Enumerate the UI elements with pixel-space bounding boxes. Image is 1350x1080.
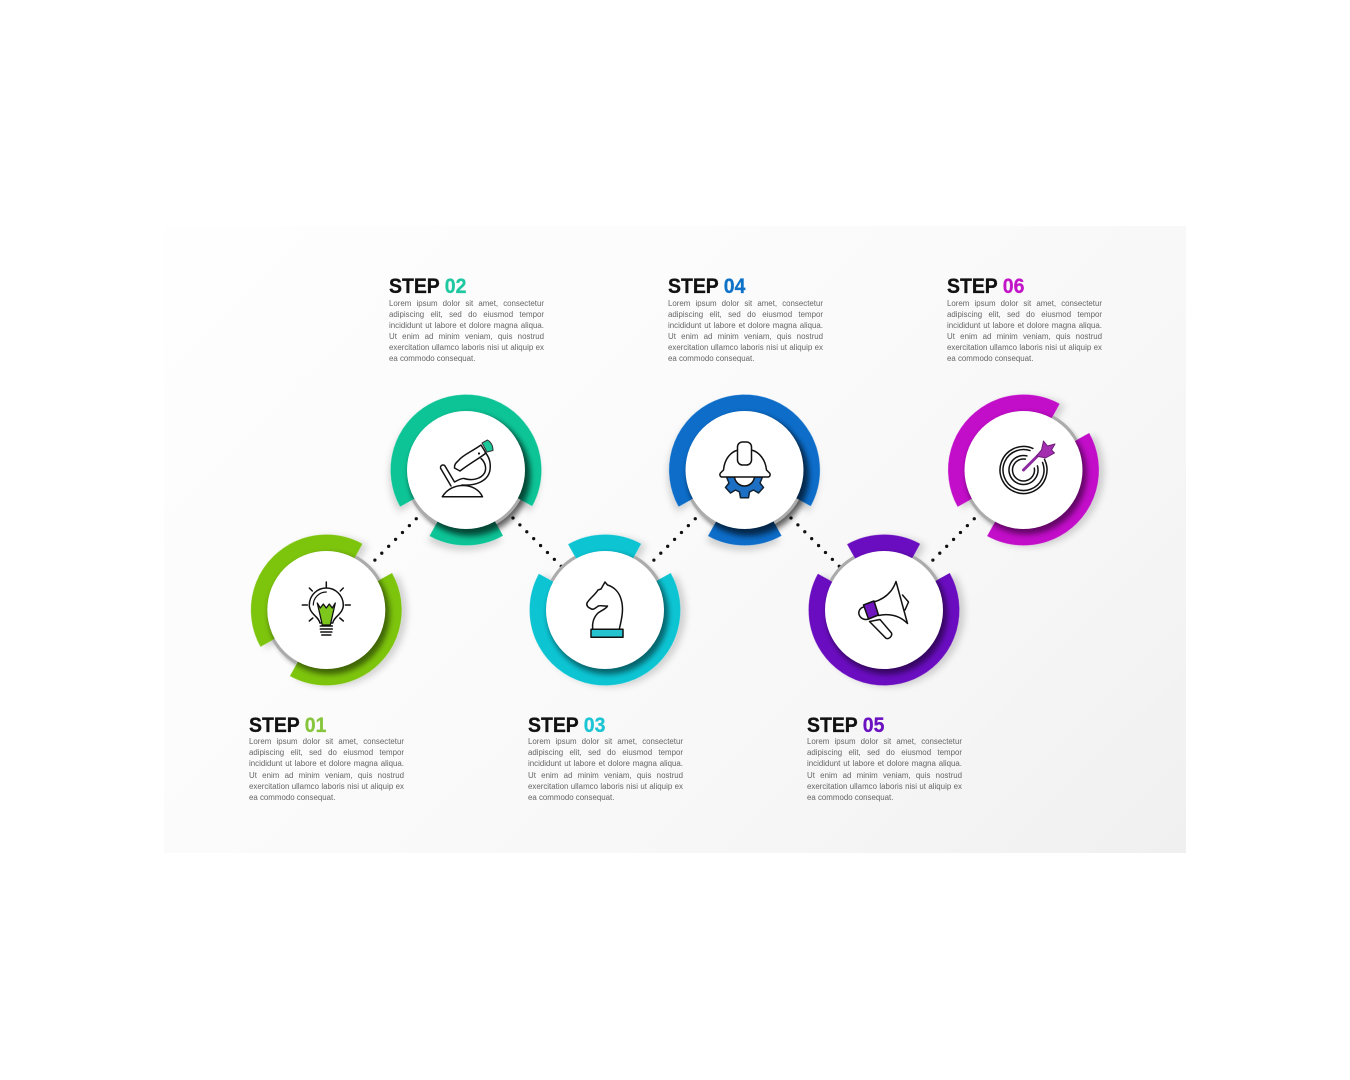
body text: step 05: adipiscing elit, sed do eiusmod tempor xyxy=(807,748,962,757)
icon: light bulb xyxy=(302,582,350,635)
body text: step 01 xyxy=(249,737,404,802)
body text: step 04: Lorem ipsum dolor sit amet, consectetur xyxy=(668,299,823,308)
body text: step 03: adipiscing elit, sed do eiusmod tempor xyxy=(528,748,683,757)
body text: step 04: ea commodo consequat. xyxy=(668,354,754,363)
body text: step 02: incididunt ut labore et dolore magna aliqua. xyxy=(389,321,544,330)
body text: step 06: adipiscing elit, sed do eiusmod tempor xyxy=(947,310,1102,319)
step 01 text xyxy=(249,714,404,802)
step 03 text xyxy=(528,714,683,802)
dotted connectors xyxy=(368,515,978,567)
body text: step 03: ea commodo consequat. xyxy=(528,793,614,802)
ring: magenta xyxy=(932,379,1115,561)
heading: step 06: STEP 06 xyxy=(947,275,1024,298)
body text: step 06: incididunt ut labore et dolore magna aliqua. xyxy=(947,321,1102,330)
body text: step 02 xyxy=(389,299,544,363)
icon: megaphone xyxy=(859,582,908,639)
body text: step 02: Lorem ipsum dolor sit amet, consectetur xyxy=(389,299,544,308)
body text: step 01: Ut enim ad minim veniam, quis nostrud xyxy=(249,771,404,780)
background panel xyxy=(164,226,1186,853)
body text: step 03: Lorem ipsum dolor sit amet, consectetur xyxy=(528,737,683,746)
heading: step 02: STEP 02 xyxy=(389,275,466,298)
body text: step 01: exercitation ullamco laboris nisi ut aliquip ex xyxy=(249,782,404,791)
body text: step 04: exercitation ullamco laboris nisi ut aliquip ex xyxy=(668,343,823,352)
heading: step 03: STEP 03 xyxy=(528,714,605,736)
body text: step 02: ea commodo consequat. xyxy=(389,354,475,363)
body text: step 05: ea commodo consequat. xyxy=(807,793,893,802)
body text: step 06 xyxy=(947,299,1102,363)
body text: step 05 xyxy=(807,737,962,802)
step 2 circle xyxy=(375,379,557,561)
step 06 text xyxy=(947,275,1102,363)
body text: step 02: adipiscing elit, sed do eiusmod tempor xyxy=(389,310,544,319)
body text: step 02: exercitation ullamco laboris nisi ut aliquip ex xyxy=(389,343,544,352)
body text: step 06: exercitation ullamco laboris nisi ut aliquip ex xyxy=(947,343,1102,352)
body text: step 02: Ut enim ad minim veniam, quis nostrud xyxy=(389,332,544,341)
body text: step 06: Ut enim ad minim veniam, quis nostrud xyxy=(947,332,1102,341)
icon: helmet and gear xyxy=(720,442,770,498)
body text: step 04: adipiscing elit, sed do eiusmod tempor xyxy=(668,310,823,319)
step 3 circle xyxy=(514,519,696,701)
ring: cyan xyxy=(514,519,696,701)
icon: target with arrow xyxy=(992,439,1055,501)
step 05 text xyxy=(807,714,962,802)
ring: green xyxy=(235,519,417,701)
ring: purple xyxy=(793,519,975,701)
body text: step 01: ea commodo consequat. xyxy=(249,793,335,802)
icon: chess knight xyxy=(587,582,623,637)
body text: step 05: incididunt ut labore et dolore magna aliqua. xyxy=(807,759,962,768)
body text: step 05: Lorem ipsum dolor sit amet, consectetur xyxy=(807,737,962,746)
ring: blue xyxy=(653,379,836,561)
body text: step 03 xyxy=(528,737,683,802)
body text: step 05: Ut enim ad minim veniam, quis nostrud xyxy=(807,771,962,780)
step 6 circle xyxy=(932,379,1115,561)
body text: step 04: Ut enim ad minim veniam, quis nostrud xyxy=(668,332,823,341)
body text: step 06: Lorem ipsum dolor sit amet, consectetur xyxy=(947,299,1102,308)
step 04 text xyxy=(668,275,823,363)
body text: step 06: ea commodo consequat. xyxy=(947,354,1033,363)
body text: step 01: adipiscing elit, sed do eiusmod tempor xyxy=(249,748,404,757)
step 02 text xyxy=(389,275,544,363)
ring: teal xyxy=(375,379,557,561)
heading: step 04: STEP 04 xyxy=(668,275,745,298)
body text: step 01: Lorem ipsum dolor sit amet, consectetur xyxy=(249,737,404,746)
body text: step 04: incididunt ut labore et dolore magna aliqua. xyxy=(668,321,823,330)
body text: step 01: incididunt ut labore et dolore magna aliqua. xyxy=(249,759,404,768)
body text: step 04 xyxy=(668,299,823,363)
body text: step 05: exercitation ullamco laboris nisi ut aliquip ex xyxy=(807,782,962,791)
body text: step 03: incididunt ut labore et dolore magna aliqua. xyxy=(528,759,683,768)
heading: step 01: STEP 01 xyxy=(249,714,326,736)
body text: step 03: Ut enim ad minim veniam, quis nostrud xyxy=(528,771,683,780)
heading: step 05: STEP 05 xyxy=(807,714,884,736)
icon: microscope xyxy=(441,440,493,497)
step 5 circle xyxy=(793,519,975,701)
step 1 circle xyxy=(235,519,417,701)
step 4 circle xyxy=(653,379,836,561)
body text: step 03: exercitation ullamco laboris nisi ut aliquip ex xyxy=(528,782,683,791)
